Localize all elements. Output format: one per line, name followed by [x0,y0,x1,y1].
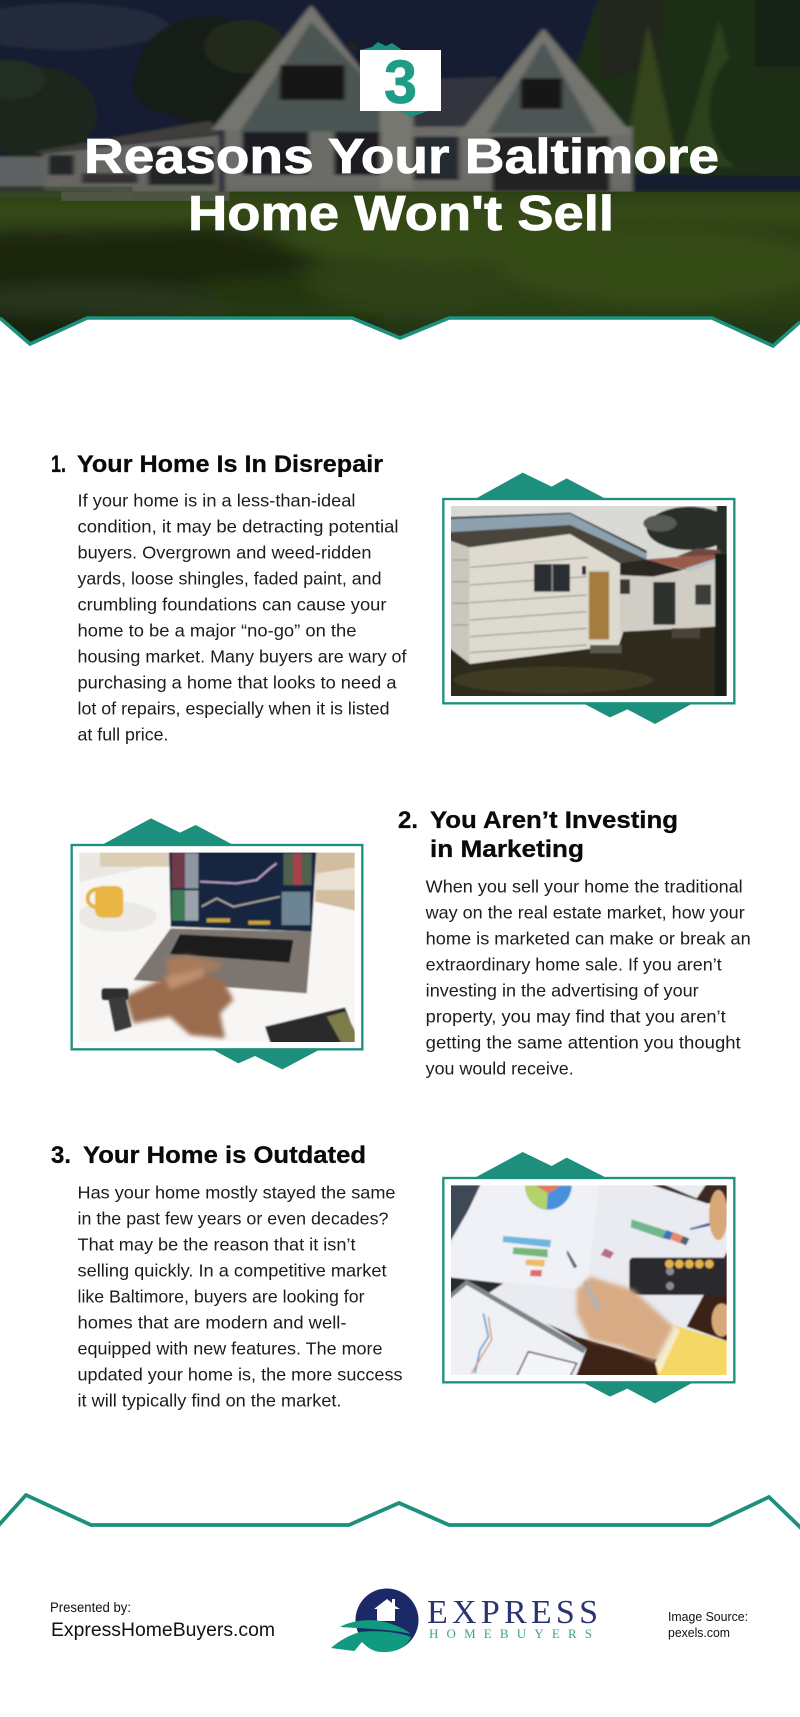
image source [668,1610,748,1640]
lawn [0,192,800,322]
image source: Image Source: [668,1610,748,1624]
section 2 heading: 2. [398,807,418,834]
image source: pexels.com [668,1626,730,1640]
presented by [50,1600,275,1641]
number badge [360,42,441,117]
section 1 text: home to be a major “no-go” on the [78,621,356,641]
section 1 text: crumbling foundations can cause your [78,595,387,615]
right trees [576,0,800,176]
section 1 text: lot of repairs, especially when it is listed [78,699,390,719]
section 2 text: extraordinary home sale. If you aren’t [426,955,722,975]
section 2 text: home is marketed can make or break an [426,929,751,949]
title: Reasons Your Baltimore [84,130,719,184]
section 2 framed photo: laptop [72,818,362,1069]
section 2 text: investing in the advertising of your [426,981,699,1001]
left trees [0,67,97,160]
hero photo: house and lawn [0,0,800,365]
section 2 text: getting the same attention you thought [426,1033,741,1053]
title: Home Won't Sell [188,187,614,241]
section 1 text: buyers. Overgrown and weed-ridden [78,543,372,563]
lower floor [224,127,633,193]
section 1 text: If your home is in a less-than-ideal [78,491,356,511]
logo [331,1588,598,1652]
section 1 framed photo: house [443,473,735,724]
section 2 text: property, you may find that you aren’t [426,1007,726,1027]
left wing [36,121,222,154]
section 1 text: at full price. [78,725,168,745]
section 2 heading: in Marketing [430,836,584,863]
section 1 text: housing market. Many buyers are wary of [78,647,407,667]
section 1 heading: 1. [51,451,66,478]
number badge: 3 [384,48,417,116]
right gable [457,28,633,137]
section 1 text: condition, it may be detracting potential [78,517,398,537]
logo: HOMEBUYERS [429,1626,592,1641]
hero bottom zigzag border [0,318,800,346]
section 2 text: you would receive. [426,1059,574,1079]
presented by: ExpressHomeBuyers.com [51,1619,275,1641]
section 2 text: When you sell your home the traditional [426,877,743,897]
far mid roof [414,76,499,126]
section 1 heading: Your Home Is In Disrepair [77,451,383,478]
section 3 heading: Your Home is Outdated [83,1142,366,1169]
section 3 text: selling quickly. In a competitive market [78,1261,387,1281]
section 2 text: way on the real estate market, how your [425,903,745,923]
section 3 heading: 3. [51,1142,71,1169]
section 2 text [425,877,751,1079]
section 3 text: it will typically find on the market. [78,1391,342,1411]
footer zigzag divider [0,1495,800,1529]
section 3 text: updated your home is, the more success [78,1365,403,1385]
section 3 text: Has your home mostly stayed the same [78,1183,396,1203]
section 3 text [78,1183,403,1411]
section 3 framed photo: charts on desk [443,1152,734,1403]
logo: EXPRESS [427,1594,598,1631]
section 1 text: purchasing a home that looks to need a [78,673,397,693]
title [84,130,719,241]
section 3 text: homes that are modern and well- [78,1313,347,1333]
section 3 text: equipped with new features. The more [78,1339,382,1359]
section 1 text [78,491,407,745]
section 3 text: in the past few years or even decades? [78,1209,389,1229]
section 3 text: like Baltimore, buyers are looking for [78,1287,365,1307]
hands [125,955,233,1038]
section 3 text: That may be the reason that it isn’t [78,1235,356,1255]
presented by: Presented by: [50,1600,131,1615]
section 1 text: yards, loose shingles, faded paint, and [78,569,382,589]
hand [577,1277,673,1362]
section 2 heading [398,807,678,863]
section 2 heading: You Aren’t Investing [430,807,678,834]
left gable [210,4,360,132]
